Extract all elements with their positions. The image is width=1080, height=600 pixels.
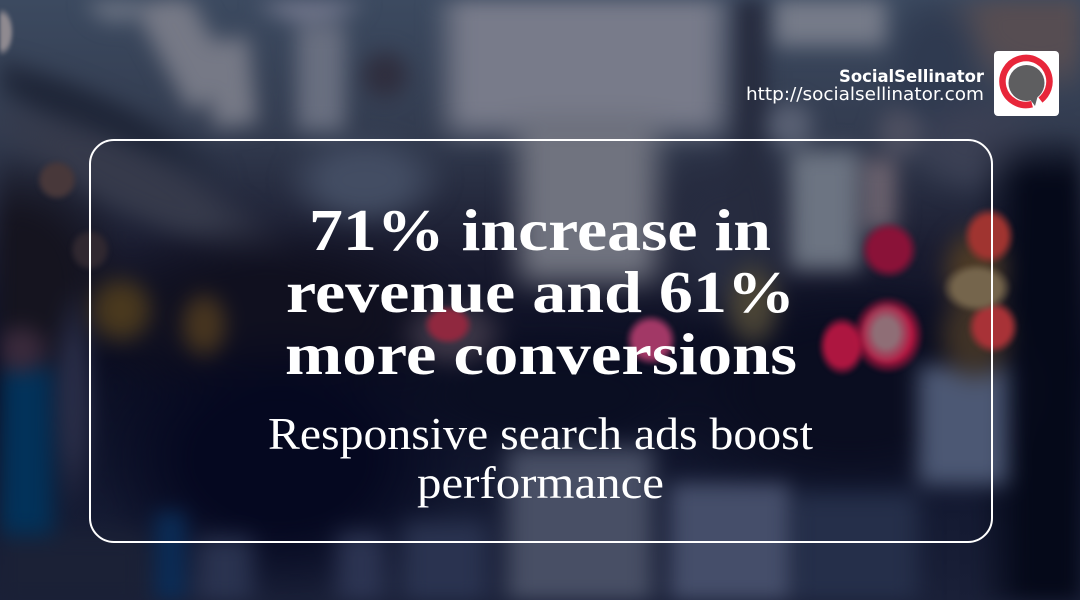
subheading bbox=[268, 409, 814, 508]
logo icon bbox=[994, 51, 1059, 116]
brand name and URL bbox=[746, 67, 985, 105]
brand name and URL: http://socialsellinator.com bbox=[746, 84, 984, 105]
headline: more conversions bbox=[285, 321, 797, 387]
subheading: Responsive search ads boost bbox=[268, 409, 814, 459]
headline bbox=[285, 197, 797, 387]
light sky area bbox=[430, 0, 740, 150]
rounded outline frame bbox=[90, 140, 992, 542]
subheading: performance bbox=[417, 458, 664, 508]
headline: revenue and 61% bbox=[286, 259, 795, 325]
brand name and URL: SocialSellinator bbox=[839, 67, 985, 86]
headline: 71% increase in bbox=[309, 197, 771, 263]
